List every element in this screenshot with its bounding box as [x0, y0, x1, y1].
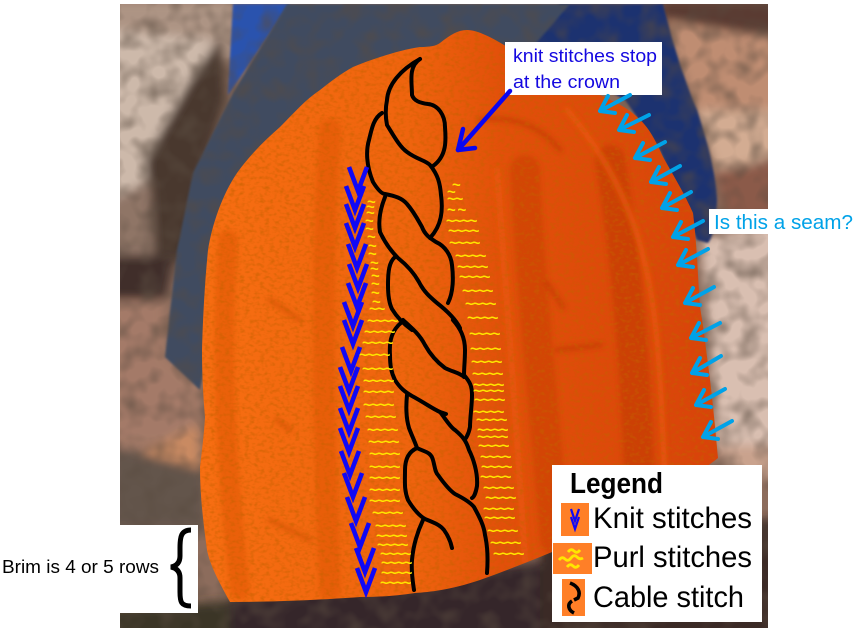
purl stitches: yellow rows right of cable: ~~~~: [472, 366, 504, 383]
purl stitches: yellow rows right of cable: ~~~~: [477, 422, 509, 439]
purl stitches: yellow rows right of cable: ~~~~: [448, 223, 480, 240]
purl stitches: yellow rows left of cable: ~: [371, 268, 380, 285]
arrow: to the crown: [458, 91, 510, 150]
purl stitches: yellow rows left of cable: ~~~~: [372, 505, 404, 522]
legend icon: knit: [561, 503, 589, 536]
purl stitches: yellow rows left of cable: ~~~~: [363, 397, 395, 414]
purl stitches: yellow rows left of cable: ~~~~: [381, 555, 413, 572]
knit stitches: blue V column: [340, 167, 375, 592]
brim callout panel: Brim is 4 or 5 rows: [2, 557, 159, 577]
purl stitches: yellow rows left of cable: ~: [367, 229, 376, 246]
purl stitches: yellow rows left of cable: ~: [368, 246, 377, 263]
purl stitches: yellow rows right of cable: ~~~~: [457, 259, 489, 276]
purl stitches: yellow rows left of cable: ~: [365, 213, 374, 230]
purl stitches: yellow rows left of cable: ~~~~: [367, 313, 399, 330]
purl stitches: yellow rows left of cable: ~~~~: [369, 446, 401, 463]
hat knit shading: [195, 25, 725, 605]
purl stitches: yellow rows left of cable: ~~~~: [369, 482, 401, 499]
purl stitches: yellow rows left of cable: ~: [366, 205, 375, 222]
purl stitches: yellow rows left of cable: [359, 194, 413, 592]
purl stitches: yellow rows left of cable: ~: [370, 255, 379, 272]
charcoal hat behind: [165, 4, 570, 390]
legend icon: purl: [553, 543, 592, 574]
purl stitches: yellow rows right of cable: ~~~~: [474, 392, 506, 409]
purl stitches: yellow rows right of cable: ~~~~: [465, 296, 497, 313]
purl stitches: yellow rows right of cable: ~~~~: [485, 490, 517, 507]
purl stitches: yellow rows right of cable: ~~~~: [477, 429, 509, 446]
purl stitches: yellow rows right of cable: ~~~~: [473, 404, 505, 421]
legend panel: [552, 465, 762, 622]
purl stitches: yellow rows left of cable: ~~~~: [365, 409, 397, 426]
purl stitches: yellow rows right of cable: ~~~~: [449, 235, 481, 252]
purl stitches: yellow rows left of cable: ~~~~: [363, 373, 395, 390]
bright blue hat behind: [228, 4, 290, 95]
callout: knit stitches stop at the crown: [505, 42, 662, 95]
purl stitches: yellow rows left of cable: ~~: [369, 301, 386, 318]
purl stitches: yellow rows left of cable: ~~~~: [380, 575, 412, 592]
purl stitches: yellow rows right of cable: ~~~~: [473, 377, 505, 394]
purl stitches: yellow rows left of cable: ~~~~: [363, 384, 395, 401]
purl stitches: yellow rows right of cable: ~: [452, 177, 461, 194]
navy hat behind: [520, 4, 717, 243]
purl stitches: yellow rows right of cable: ~~: [447, 191, 464, 208]
brim callout panel: [2, 525, 198, 613]
purl stitches: yellow rows left of cable: ~: [365, 221, 374, 238]
purl stitches: yellow rows right of cable: ~~~~: [471, 354, 503, 371]
purl stitches: yellow rows left of cable: ~: [370, 261, 379, 278]
purl stitches: yellow rows right of cable: ~~~~: [455, 248, 487, 265]
purl stitches: yellow rows left of cable: ~~~~: [377, 537, 409, 554]
purl stitches: yellow rows right of cable: [446, 177, 525, 563]
legend panel: Knit stitches: [593, 502, 752, 535]
purl stitches: yellow rows right of cable: ~~~~: [478, 438, 510, 455]
purl stitches: yellow rows left of cable: ~: [371, 285, 380, 302]
purl stitches: yellow rows right of cable: ~~~~: [480, 469, 512, 486]
purl stitches: yellow rows right of cable: ~~~~: [459, 269, 491, 286]
callout: is this a seam: Is this a seam?: [714, 211, 853, 234]
purl stitches: yellow rows left of cable: ~~~~: [362, 361, 394, 378]
purl stitches: yellow rows left of cable: ~~~~: [362, 335, 394, 352]
purl stitches: yellow rows right of cable: ~~~~: [480, 449, 512, 466]
purl stitches: yellow rows right of cable: ~~~~: [481, 459, 513, 476]
purl stitches: yellow rows left of cable: ~: [366, 199, 375, 216]
purl stitches: yellow rows left of cable: ~: [367, 194, 376, 211]
orange hat body: [200, 30, 718, 602]
photo: hat on autumn leaves: [110, 0, 780, 634]
seam arrows: [600, 95, 732, 439]
purl stitches: yellow rows left of cable: ~~~~: [368, 434, 400, 451]
purl stitches: yellow rows right of cable: ~~~~: [467, 310, 499, 327]
purl stitches: yellow rows left of cable: ~~~~: [380, 546, 412, 563]
purl stitches: yellow rows left of cable: ~~~~: [364, 324, 396, 341]
purl stitches: yellow rows right of cable: ~~~~: [493, 546, 525, 563]
purl stitches: yellow rows right of cable: ~~~~: [484, 510, 516, 527]
purl stitches: yellow rows right of cable: ~: [447, 184, 456, 201]
legend panel: Legend: [570, 468, 663, 500]
purl stitches: yellow rows right of cable: ~~~~: [470, 341, 502, 358]
legend panel: Cable stitch: [593, 581, 744, 614]
purl stitches: yellow rows right of cable: ~~~~: [476, 412, 508, 429]
purl stitches: yellow rows right of cable: ~~~~: [473, 383, 505, 400]
purl stitches: yellow rows right of cable: ~~~~: [490, 535, 522, 552]
purl stitches: yellow rows right of cable: ~~~~: [483, 480, 515, 497]
purl stitches: yellow rows left of cable: ~~~~: [369, 470, 401, 487]
purl stitches: yellow rows right of cable: ~ ~: [447, 202, 467, 219]
photo grain: [120, 4, 768, 628]
purl stitches: yellow rows left of cable: ~: [372, 294, 381, 311]
purl stitches: yellow rows left of cable: ~~~~: [381, 565, 413, 582]
purl stitches: yellow rows right of cable: ~~~~: [462, 283, 494, 300]
purl stitches: yellow rows right of cable: ~~~~: [487, 523, 519, 540]
purl stitches: yellow rows left of cable: ~~~~: [359, 347, 391, 364]
purl stitches: yellow rows left of cable: ~~~~: [369, 459, 401, 476]
purl stitches: yellow rows left of cable: ~~~~: [375, 518, 407, 535]
cable stitch outline: [367, 59, 488, 590]
legend icon: cable: [562, 579, 585, 616]
callout: knit stitches stop at the crown: at the crown: [513, 71, 620, 92]
purl stitches: yellow rows left of cable: ~~~~: [369, 493, 401, 510]
purl stitches: yellow rows right of cable: ~~~~: [446, 213, 478, 230]
purl stitches: yellow rows right of cable: ~~~~: [483, 501, 515, 518]
purl stitches: yellow rows left of cable: ~: [371, 276, 380, 293]
purl stitches: yellow rows left of cable: ~~~~: [376, 528, 408, 545]
legend panel: Purl stitches: [593, 541, 752, 574]
purl stitches: yellow rows right of cable: ~~~~: [469, 326, 501, 343]
purl stitches: yellow rows left of cable: ~~~~: [367, 422, 399, 439]
purl stitches: yellow rows left of cable: ~: [368, 238, 377, 255]
callout: knit stitches stop at the crown: knit stitches stop: [513, 45, 657, 66]
